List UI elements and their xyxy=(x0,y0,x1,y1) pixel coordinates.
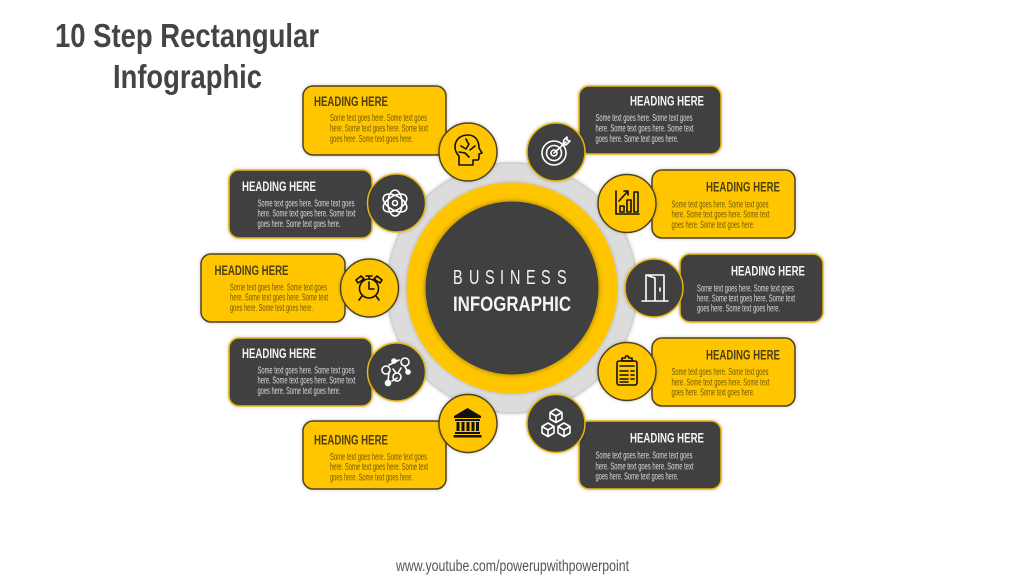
panel: step 10 bottom right xyxy=(527,394,721,489)
panel: step 2 upper left xyxy=(229,170,426,238)
panel: step 3 middle left: HEADING HERE xyxy=(214,263,288,278)
panel: step 8 middle right: goes here. Some text goes here. xyxy=(697,304,780,314)
title: Infographic xyxy=(113,59,262,96)
panel: step 9 lower right xyxy=(598,338,795,406)
panel: step 9 lower right: goes here. Some text goes here. xyxy=(672,388,754,398)
title xyxy=(55,18,319,96)
panel: step 6 top right: goes here. Some text goes here. xyxy=(596,134,678,145)
panel: step 2 upper left: HEADING HERE xyxy=(242,179,316,194)
hub label xyxy=(453,266,571,316)
panel: step 1 top left: HEADING HERE xyxy=(314,94,388,109)
panel: step 7 upper right: goes here. Some text goes here. xyxy=(672,220,754,231)
panel: step 10 bottom right: here. Some text goes here. Some text xyxy=(596,462,694,472)
panel: step 8 middle right xyxy=(625,254,823,322)
icon: stacked cubes xyxy=(542,409,570,436)
panel: step 10 bottom right: goes here. Some text goes here. xyxy=(596,472,678,482)
icon: clipboard checklist xyxy=(617,356,637,385)
panel: step 10 bottom right: Some text goes here. Some text goes xyxy=(596,450,692,462)
panel: step 1 top left: goes here. Some text goes here. xyxy=(330,134,413,145)
title: 10 Step Rectangular xyxy=(55,18,319,55)
panel: step 7 upper right: Some text goes here. Some text goes xyxy=(672,200,768,210)
panel: step 9 lower right: HEADING HERE xyxy=(706,348,780,362)
panel: step 3 middle left: Some text goes here. Some text goes xyxy=(230,282,327,294)
icon: head with brain xyxy=(455,135,482,165)
panel: step 7 upper right: HEADING HERE xyxy=(706,180,780,194)
panel: step 6 top right: HEADING HERE xyxy=(630,94,704,108)
panel: step 2 upper left: Some text goes here. Some text goes xyxy=(258,198,354,210)
panel: step 3 middle left: here. Some text goes here. Some text xyxy=(230,292,328,304)
icon: open door xyxy=(642,275,668,301)
panel: step 8 middle right: Some text goes here. Some text goes xyxy=(697,284,794,294)
hub label: INFOGRAPHIC xyxy=(453,292,571,316)
panel: step 9 lower right: here. Some text goes here. Some text xyxy=(672,378,770,388)
icon: bar chart with arrow xyxy=(616,191,639,214)
icon: atom xyxy=(380,190,410,216)
panel: step 7 upper right xyxy=(598,170,795,238)
icon: people network xyxy=(382,358,410,386)
panel: step 6 top right xyxy=(527,86,721,181)
panel: step 4 lower left xyxy=(229,338,426,406)
panel: step 1 top left xyxy=(303,86,497,181)
panel: step 4 lower left: HEADING HERE xyxy=(242,346,316,361)
central hub xyxy=(387,163,637,413)
panel: step 10 bottom right: HEADING HERE xyxy=(630,430,704,446)
hub label: BUSINESS xyxy=(453,266,567,289)
panel: step 1 top left: here. Some text goes here. Some text xyxy=(330,124,428,134)
panel: step 2 upper left: here. Some text goes here. Some text xyxy=(258,208,356,220)
panel: step 4 lower left: here. Some text goes here. Some text xyxy=(258,376,356,386)
icon: bank building xyxy=(454,408,482,438)
panel: step 5 bottom left xyxy=(303,394,497,489)
panel: step 4 lower left: Some text goes here. Some text goes xyxy=(258,366,354,376)
panel: step 5 bottom left: Some text goes here. Some text goes xyxy=(330,452,427,463)
panel: step 1 top left: Some text goes here. Some text goes xyxy=(330,113,427,124)
panel: step 9 lower right: Some text goes here. Some text goes xyxy=(672,367,768,378)
panel: step 6 top right: Some text goes here. Some text goes xyxy=(596,113,692,124)
icon: alarm clock xyxy=(356,276,382,300)
panel: step 7 upper right: here. Some text goes here. Some text xyxy=(672,210,770,220)
panel: step 8 middle right: here. Some text goes here. Some text xyxy=(697,294,795,304)
panel: step 3 middle left: goes here. Some text goes here. xyxy=(230,303,313,314)
panel: step 5 bottom left: HEADING HERE xyxy=(314,432,388,448)
footer url: www.youtube.com/powerupwithpowerpoint xyxy=(395,558,630,575)
panel: step 8 middle right: HEADING HERE xyxy=(731,264,805,278)
panel: step 6 top right: here. Some text goes here. Some text xyxy=(596,124,694,134)
panel: step 2 upper left: goes here. Some text goes here. xyxy=(258,219,340,230)
panel: step 3 middle left xyxy=(201,254,398,322)
panel: step 4 lower left: goes here. Some text goes here. xyxy=(258,386,340,397)
panel: step 5 bottom left: here. Some text goes here. Some text xyxy=(330,462,428,473)
panel: step 5 bottom left: goes here. Some text goes here. xyxy=(330,472,413,484)
icon: target xyxy=(542,137,570,165)
